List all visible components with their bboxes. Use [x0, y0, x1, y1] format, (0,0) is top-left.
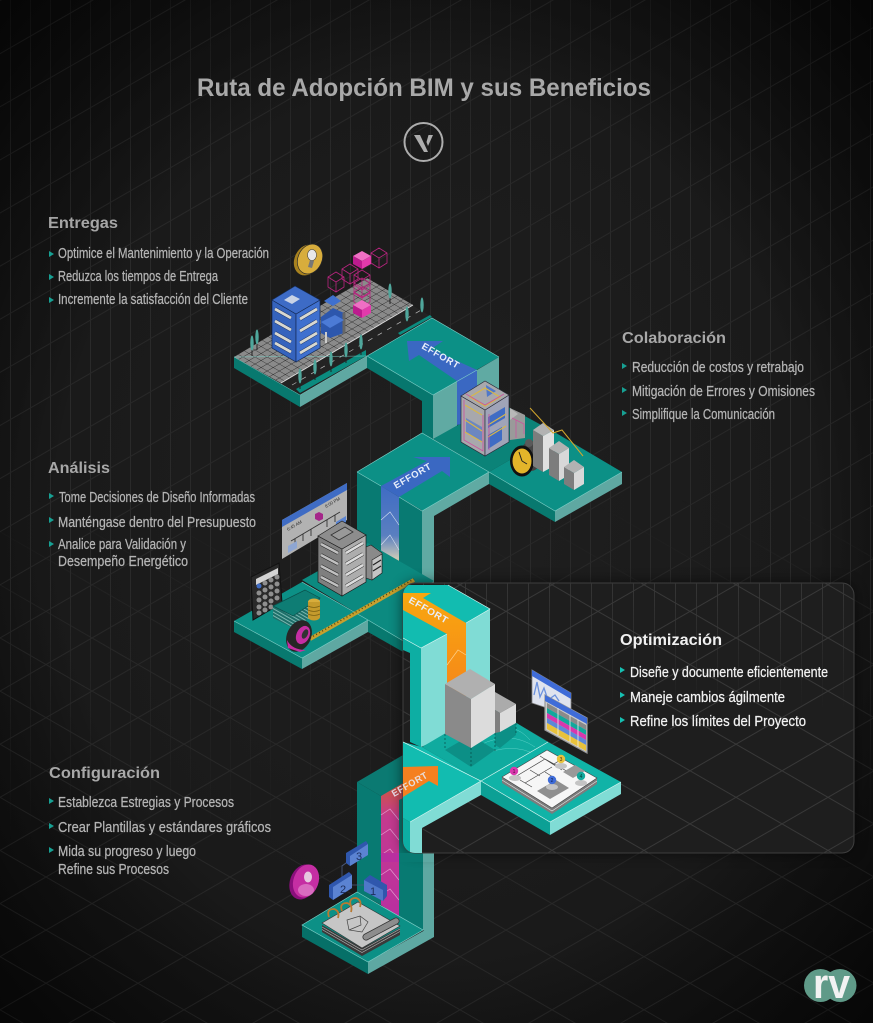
icon: notebook: [322, 898, 400, 956]
heading: Configuración: Configuración: [49, 765, 160, 782]
tall bar: [533, 423, 554, 472]
bullet 2: Maneje cambios ágilmente: [630, 690, 785, 706]
pin 1: 1: [513, 769, 516, 775]
heading: Optimización: Optimización: [620, 632, 722, 649]
optimization floor tiles: [403, 707, 621, 853]
small bar: [564, 460, 584, 490]
icon: person disc: [285, 861, 324, 903]
bullet 3: Incremente la satisfacción del Cliente: [58, 292, 248, 308]
section: Optimización text: [620, 632, 828, 730]
icon: brand V logo: [404, 123, 442, 161]
arrow label EFFORT: EFFORT: [420, 341, 461, 372]
bullet 2: Mitigación de Errores y Omisiones: [632, 384, 815, 400]
path: first effort tile and wall (blue): [367, 318, 556, 472]
icon: calculator: [251, 563, 282, 620]
step 3: 3: [356, 851, 362, 863]
bottom platform: Configuración stage: [302, 755, 434, 974]
bullet 3: Mida su progreso y luego: [58, 844, 196, 860]
title: Ruta de Adopción BIM y sus Beneficios: [197, 74, 651, 102]
bullet 2: Reduzca los tiempos de Entrega: [58, 269, 219, 285]
bullet 1: Optimice el Mantenimiento y la Operación: [58, 246, 269, 262]
trees along road: [250, 284, 424, 389]
small massing block: [495, 692, 516, 733]
arrow label EFFORT across panel edge: EFFORT: [390, 770, 430, 800]
step 2: 2: [340, 884, 346, 896]
blueprint sheets: [502, 750, 597, 814]
lower wall outside the panel: [381, 853, 434, 862]
bullet 3: Simplifique la Comunicación: [632, 407, 775, 423]
trend arrow: [530, 408, 583, 456]
icon: numbered steps: [329, 841, 387, 901]
panel shadow: [403, 583, 854, 853]
magenta cube top: [353, 251, 371, 269]
heading: Análisis: Análisis: [48, 460, 110, 477]
optimization path wall: [403, 585, 490, 747]
lower orange arrow: [403, 766, 438, 797]
section: Análisis text: [48, 460, 256, 570]
icon: lightbulb coin: [289, 240, 327, 280]
icon: stopwatch: [510, 439, 542, 476]
heading: Colaboración: Colaboración: [622, 330, 726, 347]
blue building: [272, 286, 320, 362]
small grey annex: [366, 545, 382, 580]
bullet 3: [49, 844, 196, 878]
heading: Entregas: Entregas: [48, 215, 118, 232]
arrow label EFFORT: EFFORT: [406, 595, 450, 627]
bullet 1: Tome Decisiones de Diseño Informadas: [59, 490, 255, 506]
arrow label EFFORT: EFFORT: [392, 461, 434, 492]
icon: money stack and coins: [273, 590, 320, 628]
path: second effort tile and wall (blue to yellow): [357, 433, 489, 590]
bullet 3: Analice para Validación y: [58, 537, 187, 553]
medium bar: [549, 441, 569, 481]
large massing block: [445, 669, 495, 748]
bullet 2: Manténgase dentro del Presupuesto: [58, 515, 256, 531]
wireframe and magenta cubes: [328, 248, 387, 318]
bullet 3: Desempeño Energético: [58, 554, 188, 570]
building footprint: [445, 722, 516, 767]
section: Colaboración text: [622, 330, 815, 423]
section: Configuración text: [49, 765, 271, 878]
magenta cube bottom: [353, 300, 371, 318]
chart window: [532, 669, 572, 709]
pin 3: 3: [560, 757, 563, 763]
analysis window with slider: 8:00 PM: [324, 496, 341, 509]
bullet 3: Refine sus Procesos: [58, 862, 169, 878]
analysis window with slider: [282, 483, 347, 559]
blue pavilion: [321, 295, 344, 343]
platform: Colaboración tile: [489, 433, 622, 522]
bullet 1: Establezca Estregias y Procesos: [58, 795, 234, 811]
analysis window with slider: 6:45 AM: [286, 519, 303, 532]
bullet 2: Crear Plantillas y estándares gráficos: [58, 820, 271, 836]
step 1: 1: [370, 886, 376, 898]
pin 4: 4: [580, 774, 583, 780]
bullet 1: Diseñe y documente eficientemente: [630, 665, 828, 681]
panel: Optimización highlight: [403, 583, 854, 853]
bullet 3: Refine los límites del Proyecto: [630, 714, 806, 730]
icon: measuring tape: [281, 579, 414, 656]
section: Entregas text: [48, 215, 269, 308]
bullet 1: Reducción de costos y retrabajo: [632, 360, 804, 376]
bar chart: [530, 408, 584, 490]
top platform: Entregas stage: [234, 278, 432, 407]
logo: rv: rv: [813, 960, 851, 1007]
transparent BIM building: [461, 381, 525, 456]
platform: Análisis tiles: [234, 543, 434, 669]
grey building: [318, 521, 366, 596]
pin 2: 2: [551, 778, 554, 784]
bullet 3: [49, 537, 188, 570]
data table window: [545, 695, 587, 753]
